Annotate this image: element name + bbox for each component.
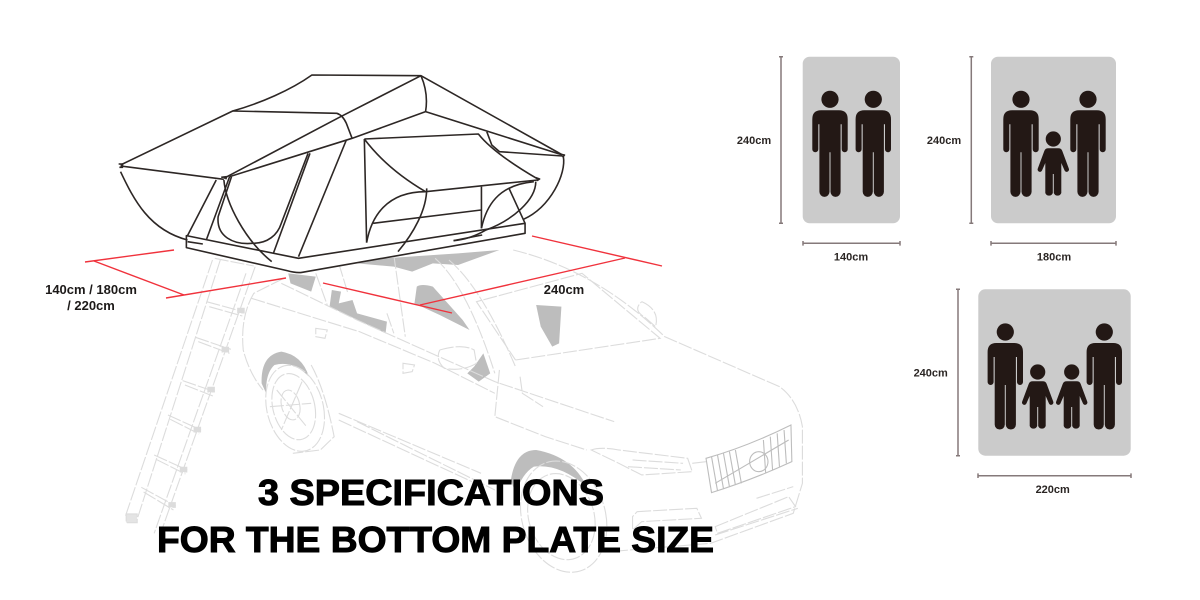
icon: two adults xyxy=(812,91,891,197)
car grille xyxy=(706,425,792,493)
car dark glass and wheel-arch shading xyxy=(262,250,587,493)
tent canopy lines xyxy=(121,75,563,165)
plate xyxy=(991,57,1116,223)
illustration: rooftop tent xyxy=(119,75,564,273)
plate xyxy=(803,57,900,223)
tent right window lines xyxy=(364,134,538,179)
height label: 240cm xyxy=(737,135,771,147)
dimension lines: red width and length xyxy=(85,236,662,313)
tent base plate xyxy=(186,223,525,273)
panel: 140cm plate xyxy=(737,57,900,264)
height label: 240cm xyxy=(914,368,948,380)
plate xyxy=(978,289,1131,456)
panel: 220cm plate xyxy=(914,289,1131,496)
height label: 240cm xyxy=(927,135,961,147)
width label: 180cm xyxy=(1037,252,1071,264)
ladder xyxy=(125,258,255,533)
height dimension xyxy=(956,289,960,456)
label: tent width: / 220cm xyxy=(67,298,115,313)
label: tent width xyxy=(45,282,137,313)
car outline lines xyxy=(243,250,802,576)
title xyxy=(157,472,714,560)
height dimension xyxy=(969,57,973,223)
width dimension xyxy=(803,241,900,246)
width dimension xyxy=(978,473,1131,478)
panel: 180cm plate xyxy=(927,57,1116,264)
width label: 140cm xyxy=(834,252,868,264)
width dimension xyxy=(991,241,1116,246)
icon: two adults and child xyxy=(1003,91,1106,197)
title: 3 SPECIFICATIONS xyxy=(258,472,604,513)
height dimension xyxy=(779,57,783,223)
title: FOR THE BOTTOM PLATE SIZE xyxy=(157,519,714,560)
label: tent length: 240cm xyxy=(544,282,584,297)
label: tent width: 140cm / 180cm xyxy=(45,282,137,297)
illustration: car with ladder xyxy=(125,250,802,576)
width label: 220cm xyxy=(1036,484,1070,496)
icon: two adults and two children xyxy=(988,323,1122,430)
